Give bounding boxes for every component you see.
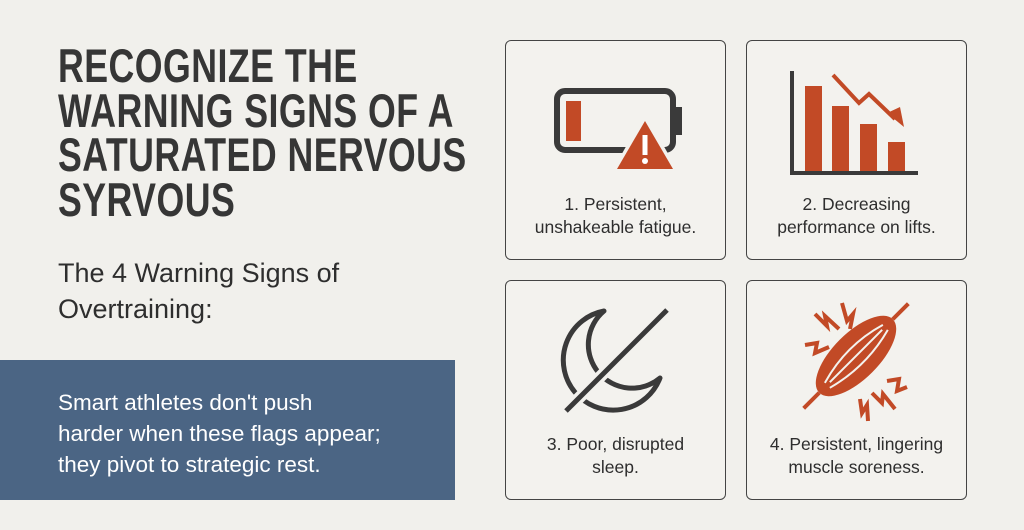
card 4: soreness: muscle soreness. <box>788 457 925 477</box>
icon: crossed-out moon <box>560 308 669 413</box>
icon: sore muscle <box>802 302 910 422</box>
card 1: fatigue: unshakeable fatigue. <box>535 217 696 237</box>
card 4: soreness <box>746 280 967 500</box>
card 2: performance <box>746 40 967 260</box>
icon: low battery with warning <box>554 88 682 169</box>
title <box>58 39 467 226</box>
card 3: sleep: 3. Poor, disrupted <box>547 434 684 454</box>
card 2: performance: 2. Decreasing <box>802 194 910 214</box>
title: SATURATED NERVOUS <box>58 128 467 181</box>
callout box: harder when these flags appear; <box>58 421 381 446</box>
card 1: fatigue: 1. Persistent, <box>564 194 667 214</box>
callout box: Smart athletes don't push <box>58 390 312 415</box>
card 1: fatigue <box>505 40 726 260</box>
subtitle: Overtraining: <box>58 294 213 324</box>
callout box: they pivot to strategic rest. <box>58 452 321 477</box>
title: WARNING SIGNS OF A <box>58 84 454 136</box>
card 3: sleep <box>505 280 726 500</box>
card 4: soreness: 4. Persistent, lingering <box>770 434 943 454</box>
callout box <box>0 360 455 500</box>
subtitle <box>58 258 340 324</box>
title: SYRVOUS <box>58 172 235 226</box>
icon: declining bar chart <box>790 71 918 175</box>
subtitle: The 4 Warning Signs of <box>58 258 339 288</box>
title: RECOGNIZE THE <box>58 39 358 92</box>
card 2: performance: performance on lifts. <box>777 217 936 237</box>
card 3: sleep: sleep. <box>592 457 639 477</box>
